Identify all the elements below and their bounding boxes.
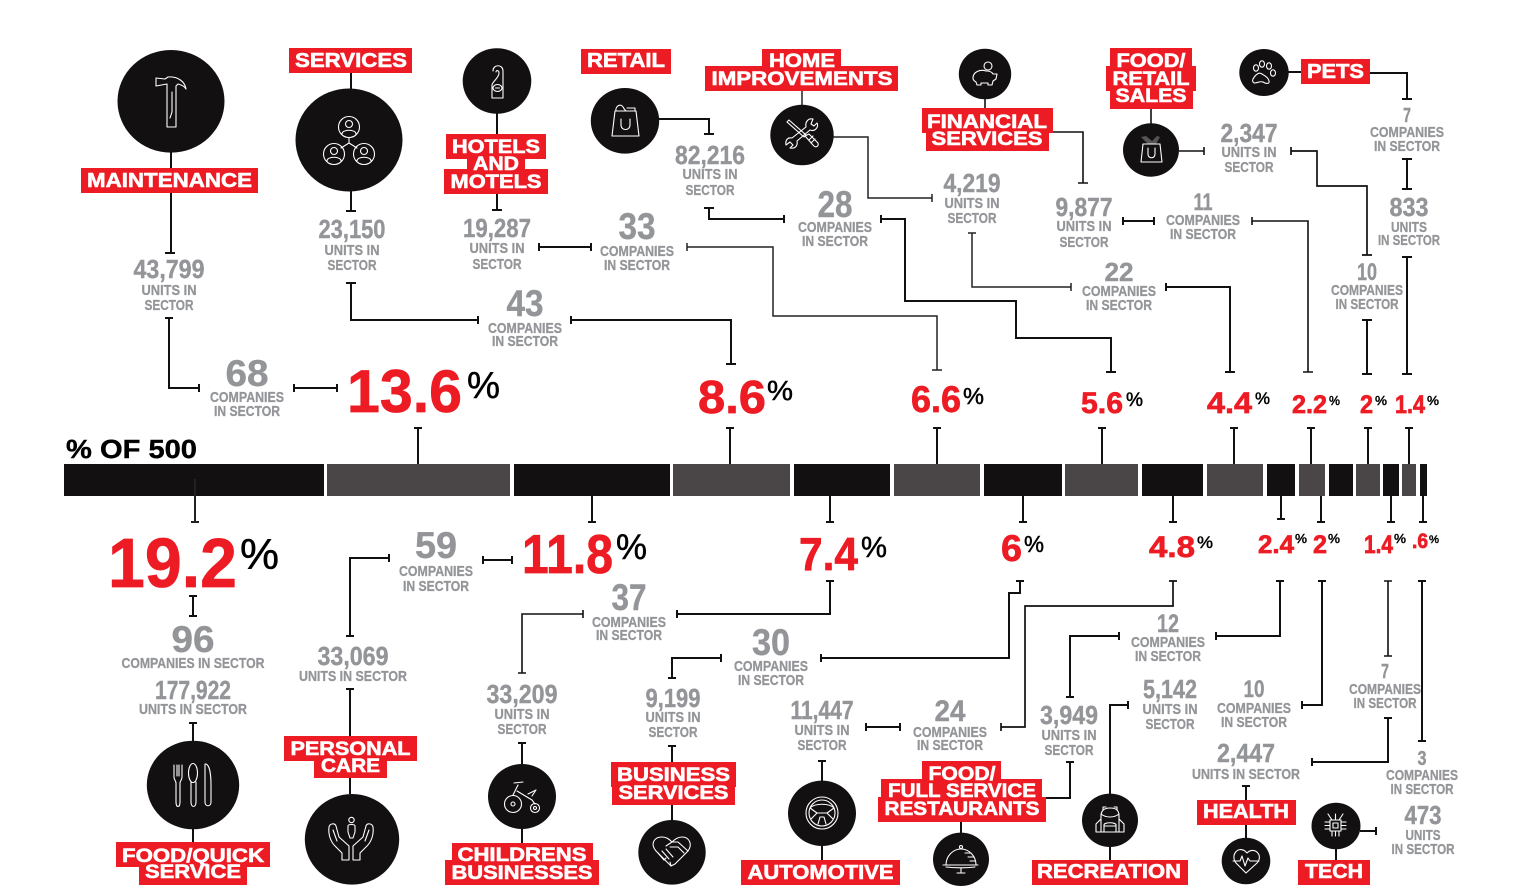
stat: 11 companies: COMPANIES	[1166, 212, 1240, 229]
stat: 833 units: IN SECTOR	[1378, 232, 1440, 249]
stat: 473 units: 473	[1404, 800, 1442, 830]
stat: 5,142 units: UNITS IN	[1142, 701, 1198, 718]
stat: 5,142 units: SECTOR	[1146, 716, 1195, 733]
stat: 2,347 units: SECTOR	[1224, 159, 1274, 176]
stat: 33,069 units	[299, 641, 407, 685]
label: home improvements	[705, 49, 898, 91]
percent: .6: %	[1429, 534, 1439, 546]
label: financial services	[922, 108, 1053, 151]
stat: 24 companies: COMPANIES	[913, 724, 987, 741]
stat: 30 companies: COMPANIES	[734, 658, 808, 675]
stat: 2,347 units: 2,347	[1220, 118, 1278, 148]
stat: 24 companies	[913, 695, 987, 754]
stat: 19,287 units	[463, 213, 531, 273]
stat: 59 companies: IN SECTOR	[403, 578, 469, 595]
percent: 2.4: 2.4	[1258, 531, 1294, 559]
stat: 3 companies	[1386, 748, 1458, 798]
panel: financial services	[922, 49, 1340, 419]
stat: 3,949 units: 3,949	[1040, 700, 1098, 730]
stat: 59 companies: COMPANIES	[399, 563, 473, 580]
stat: 68 companies: 68	[226, 353, 268, 394]
stat: 833 units: UNITS	[1391, 219, 1427, 236]
percent: 2.2: 2.2	[1292, 391, 1327, 419]
percent: 2 bottom: 2	[1313, 531, 1327, 559]
stat: 24 companies: 24	[934, 695, 966, 728]
stat: 2,447 units	[1192, 738, 1300, 783]
stat: 23,150 units	[318, 214, 386, 274]
percent: 19.2: %	[240, 531, 279, 579]
icon: hands holding person	[305, 794, 399, 885]
segmented bar	[64, 464, 1427, 496]
stat: 2,347 units	[1220, 118, 1278, 176]
label: retail	[581, 49, 671, 74]
stat: 177,922 units: 177,922	[155, 675, 231, 705]
stat: 10 companies: IN SECTOR	[1221, 714, 1287, 731]
stat: 473 units: UNITS	[1406, 827, 1440, 844]
percent: 6: 6	[1001, 528, 1022, 569]
stat: 3,949 units: SECTOR	[1044, 742, 1094, 759]
percent: 2.2: %	[1329, 393, 1340, 408]
stat: 33,209 units: SECTOR	[498, 721, 547, 738]
stat: 82,216 units: UNITS IN	[682, 166, 738, 183]
stat: 177,922 units	[139, 675, 247, 718]
stat: 96 companies: 96	[172, 619, 214, 660]
panel: home improvements	[705, 49, 1270, 420]
stat: 4,219 units: SECTOR	[948, 210, 997, 227]
panel: maintenance	[81, 50, 500, 425]
stat: 96 companies: COMPANIES IN SECTOR	[122, 655, 265, 672]
percent: 13.6: %	[467, 365, 500, 406]
stat: 43,799 units: 43,799	[134, 254, 204, 284]
stat: 33,209 units: 33,209	[486, 679, 558, 709]
label: personal care	[284, 736, 417, 778]
percent: 2 top: 2	[1360, 391, 1373, 419]
stat: 9,877 units: SECTOR	[1060, 234, 1109, 251]
stat: 473 units: IN SECTOR	[1392, 841, 1455, 858]
label: pets	[1301, 59, 1370, 84]
stat: 4,219 units	[944, 168, 1000, 227]
stat: 11,447 units	[790, 695, 854, 754]
stat: 37 companies	[592, 577, 666, 644]
percent: 4.8	[1149, 531, 1213, 564]
stat: 82,216 units	[675, 140, 745, 199]
label: recreation: RECREATION	[1037, 861, 1181, 883]
label: home improvements: IMPROVEMENTS	[712, 69, 892, 90]
stat: 22 companies: 22	[1104, 257, 1134, 287]
percent: 8.6	[698, 371, 793, 423]
stat: 2,347 units: UNITS IN	[1222, 144, 1276, 161]
label: business services: SERVICES	[618, 783, 728, 804]
panel: recreation	[1032, 531, 1307, 885]
percent: 1.4 top: %	[1427, 393, 1439, 408]
stat: 12 companies: COMPANIES	[1131, 634, 1205, 651]
label: personal care: CARE	[321, 756, 380, 777]
stat: 2,447 units: 2,447	[1217, 738, 1275, 768]
percent: 6: %	[1024, 531, 1044, 557]
icon: cloche	[933, 833, 989, 886]
stat: 28 companies: COMPANIES	[798, 219, 872, 236]
panel: business services	[611, 528, 1044, 885]
icon: hammer	[118, 50, 224, 153]
label: services: SERVICES	[295, 50, 407, 72]
stat: 7 companies bottom: IN SECTOR	[1354, 695, 1417, 712]
stat: 833 units	[1378, 192, 1440, 249]
heading: % of 500: % OF 500	[66, 434, 197, 464]
connectors above the bar	[165, 72, 1413, 464]
icon: door hanger	[463, 48, 531, 114]
percent: 2 bottom	[1313, 531, 1340, 559]
stat: 5,142 units: 5,142	[1143, 674, 1197, 704]
stat: 23,150 units: SECTOR	[328, 257, 377, 274]
label: food full service restaurants: FOOD/	[928, 764, 996, 785]
stat: 28 companies	[798, 184, 872, 250]
label: food retail sales: RETAIL	[1112, 69, 1190, 90]
stat: 7 companies	[1370, 105, 1444, 155]
label: financial services: FINANCIAL	[927, 112, 1047, 133]
stat: 7 companies: COMPANIES	[1370, 124, 1444, 141]
icon: cutlery	[147, 741, 239, 829]
stat: 12 companies: IN SECTOR	[1135, 648, 1201, 665]
stat: 10 companies	[1217, 676, 1291, 731]
panel: childrens businesses	[445, 528, 887, 885]
percent: 13.6: 13.6	[347, 358, 462, 425]
label: hotels and motels: MOTELS	[450, 172, 542, 193]
stat: 10 companies	[1331, 259, 1403, 313]
stat: 68 companies: IN SECTOR	[214, 403, 280, 420]
label: retail: RETAIL	[587, 50, 665, 72]
stat: 3,949 units: UNITS IN	[1042, 727, 1096, 744]
stat: 43,799 units: SECTOR	[144, 297, 194, 314]
stat: 11 companies	[1166, 189, 1240, 243]
percent: 5.6	[1081, 387, 1143, 420]
icon: piggy bank	[959, 49, 1011, 99]
stat: 24 companies: IN SECTOR	[917, 737, 983, 754]
percent: 8.6: 8.6	[698, 371, 766, 423]
stat: 4,219 units: 4,219	[944, 168, 1000, 198]
stat: 19,287 units: UNITS IN	[470, 240, 524, 257]
stat: 7 companies: 7	[1403, 105, 1411, 127]
stat: 43 companies: 43	[506, 283, 544, 324]
percent: 6	[1001, 528, 1044, 569]
percent: 6.6: 6.6	[911, 379, 961, 420]
panel: food quick service	[108, 524, 279, 885]
stat: 22 companies	[1082, 257, 1156, 314]
icon: microchip	[1312, 803, 1360, 849]
stat: 3 companies: IN SECTOR	[1390, 781, 1454, 798]
percent: 7.4: 7.4	[799, 528, 858, 580]
label: childrens businesses: BUSINESSES	[452, 863, 592, 884]
stat: 68 companies: COMPANIES	[210, 389, 284, 406]
label: health: HEALTH	[1203, 801, 1289, 823]
stat: 30 companies	[734, 622, 808, 689]
stat: 19,287 units: 19,287	[463, 213, 531, 243]
stat: 30 companies: IN SECTOR	[738, 672, 804, 689]
label: financial services: SERVICES	[932, 129, 1042, 150]
stat: 10 companies: 10	[1357, 259, 1377, 286]
panel: automotive	[741, 695, 900, 885]
stat: 9,877 units: 9,877	[1056, 192, 1112, 222]
stat: 9,199 units: 9,199	[646, 683, 700, 713]
stat: 5,142 units	[1142, 674, 1198, 733]
stat: 33,069 units: 33,069	[318, 641, 388, 671]
stat: 59 companies: 59	[415, 525, 457, 566]
label: hotels and motels: HOTELS	[452, 137, 540, 158]
stat: 43 companies: IN SECTOR	[492, 333, 558, 350]
stat: 82,216 units: SECTOR	[686, 182, 735, 199]
label: pets: PETS	[1307, 61, 1364, 83]
stat: 96 companies	[122, 619, 265, 672]
percent: 1.4 bottom: %	[1394, 531, 1406, 546]
stat: 37 companies: 37	[612, 577, 646, 618]
stat: 33,069 units: UNITS IN SECTOR	[299, 668, 407, 685]
panel: hotels and motels	[444, 48, 984, 420]
stat: 33,209 units	[486, 679, 558, 738]
label: food retail sales: FOOD/	[1116, 51, 1186, 72]
percent: 2 top: %	[1375, 393, 1387, 408]
stat: 37 companies: IN SECTOR	[596, 627, 662, 644]
stat: 28 companies: IN SECTOR	[802, 233, 868, 250]
percent: 1.4 top: 1.4	[1395, 391, 1425, 419]
icon: wrench and screwdriver	[770, 105, 834, 165]
label: personal care: PERSONAL	[290, 739, 411, 760]
stat: 3,949 units	[1040, 700, 1098, 759]
stat: 28 companies: 28	[818, 184, 852, 225]
icon: grocery bag	[1123, 123, 1179, 177]
percent: 11.8: 11.8	[522, 523, 613, 585]
label: childrens businesses: CHILDRENS	[458, 845, 586, 866]
stat: 10 companies: IN SECTOR	[1336, 296, 1399, 313]
label: automotive: AUTOMOTIVE	[748, 862, 894, 884]
stat: 43,799 units	[134, 254, 204, 314]
icon: connected people	[296, 88, 402, 192]
stat: 10 companies: COMPANIES	[1331, 282, 1403, 299]
stat: 43 companies	[488, 283, 562, 350]
stat: 30 companies: 30	[752, 622, 790, 663]
label: food quick service: FOOD/QUICK	[122, 846, 264, 867]
label: food quick service	[116, 842, 270, 885]
percent: 4.4: 4.4	[1207, 387, 1252, 420]
icon: steering wheel	[788, 781, 856, 846]
label: business services: BUSINESS	[617, 765, 730, 786]
stat: 68 companies	[210, 353, 284, 420]
stat: 22 companies: COMPANIES	[1082, 283, 1156, 300]
icon: backpack	[1082, 794, 1138, 847]
label: food retail sales: SALES	[1116, 86, 1186, 107]
label: food full service restaurants: RESTAURANTS	[884, 799, 1040, 820]
percent: 4.8: 4.8	[1149, 531, 1195, 564]
stat: 82,216 units: 82,216	[675, 140, 745, 170]
percent: 2 bottom: %	[1328, 531, 1340, 546]
panel: retail	[581, 49, 1143, 420]
icon: paw	[1239, 49, 1289, 96]
percent: 4.4	[1207, 387, 1270, 420]
panel: food retail sales	[1106, 48, 1403, 419]
panel: health	[1192, 531, 1340, 884]
percent: 5.6: 5.6	[1081, 387, 1123, 420]
label: tech: TECH	[1305, 861, 1363, 883]
label: business services	[611, 762, 736, 805]
label: hotels and motels	[444, 134, 548, 194]
stat: 2,447 units: UNITS IN SECTOR	[1192, 766, 1300, 783]
stat: 19,287 units: SECTOR	[472, 256, 522, 273]
stat: 12 companies	[1131, 610, 1205, 665]
stat: 3 companies: 3	[1418, 748, 1426, 770]
percent: 4.4: %	[1255, 389, 1270, 408]
stat: 33,209 units: UNITS IN	[494, 706, 550, 723]
stat: 7 companies bottom: 7	[1381, 661, 1389, 683]
label: hotels and motels: AND	[473, 154, 519, 175]
stat: 11,447 units: SECTOR	[798, 737, 847, 754]
stat: 23,150 units: UNITS IN	[324, 242, 380, 259]
percent: 2 top	[1360, 391, 1387, 419]
label: home improvements: HOME	[769, 51, 835, 72]
percent: 1.4 bottom: 1.4	[1364, 531, 1393, 559]
connectors below the bar	[189, 479, 1427, 860]
icon: handshake heart	[638, 820, 706, 885]
stat: 11 companies: 11	[1194, 189, 1212, 216]
stat: 59 companies	[399, 525, 473, 595]
stat: 23,150 units: 23,150	[318, 214, 386, 244]
percent: 8.6: %	[767, 375, 793, 406]
stat: 10 companies: 10	[1244, 676, 1264, 703]
stat: 11 companies: IN SECTOR	[1170, 226, 1236, 243]
icon: shopping bag	[591, 88, 659, 154]
stat: 4,219 units: UNITS IN	[944, 195, 1000, 212]
percent: 7.4: %	[861, 532, 887, 564]
stat: 7 companies bottom: COMPANIES	[1349, 681, 1421, 698]
stat: 177,922 units: UNITS IN SECTOR	[139, 701, 247, 718]
panel: services	[289, 48, 793, 423]
panel: food full service restaurants	[878, 531, 1213, 886]
icon: tricycle	[488, 764, 556, 829]
label: food full service restaurants	[878, 761, 1046, 822]
stat: 33 companies	[600, 206, 674, 274]
percent: 6.6: %	[963, 383, 984, 409]
stat: 833 units: 833	[1390, 192, 1428, 222]
percent: 4.8: %	[1197, 533, 1213, 552]
stat: 3 companies: COMPANIES	[1386, 767, 1458, 784]
stat: 43 companies: COMPANIES	[488, 320, 562, 337]
label: food retail sales	[1106, 48, 1196, 109]
stat: 22 companies: IN SECTOR	[1086, 297, 1152, 314]
stat: 43,799 units: UNITS IN	[142, 282, 196, 299]
stat: 33 companies: IN SECTOR	[604, 257, 670, 274]
percent: 19.2: 19.2	[108, 524, 237, 602]
stat: 7 companies: IN SECTOR	[1374, 138, 1440, 155]
label: tech	[1298, 860, 1370, 885]
label: food full service restaurants: FULL SERVICE	[888, 781, 1036, 802]
stat: 33 companies: 33	[618, 206, 656, 247]
stat: 9,199 units: UNITS IN	[646, 709, 700, 726]
stat: 12 companies: 12	[1157, 610, 1179, 638]
label: food quick service: SERVICE	[145, 862, 241, 883]
stat: 37 companies: COMPANIES	[592, 614, 666, 631]
percent: 5.6: %	[1126, 390, 1143, 411]
panel: tech	[1298, 530, 1458, 885]
stat: 9,877 units	[1056, 192, 1112, 251]
label: childrens businesses	[445, 843, 599, 885]
panel: personal care	[284, 523, 647, 885]
percent: 11.8: %	[616, 528, 647, 567]
icon: heart pulse	[1222, 838, 1270, 884]
stat: 11,447 units: 11,447	[790, 695, 854, 725]
percent: .6: .6	[1412, 530, 1428, 553]
stat: 473 units	[1392, 800, 1455, 858]
label: maintenance: MAINTENANCE	[87, 170, 252, 192]
stat: 11,447 units: UNITS IN	[794, 722, 850, 739]
stat: 10 companies: COMPANIES	[1217, 700, 1291, 717]
stat: 9,199 units	[646, 683, 700, 741]
stat: 33 companies: COMPANIES	[600, 243, 674, 260]
panel: pets	[1239, 49, 1444, 419]
percent: 2.4: %	[1295, 531, 1307, 546]
percent: .6	[1412, 530, 1439, 553]
stat: 7 companies bottom	[1349, 661, 1421, 712]
stat: 9,199 units: SECTOR	[648, 724, 698, 741]
stat: 9,877 units: UNITS IN	[1056, 218, 1112, 235]
